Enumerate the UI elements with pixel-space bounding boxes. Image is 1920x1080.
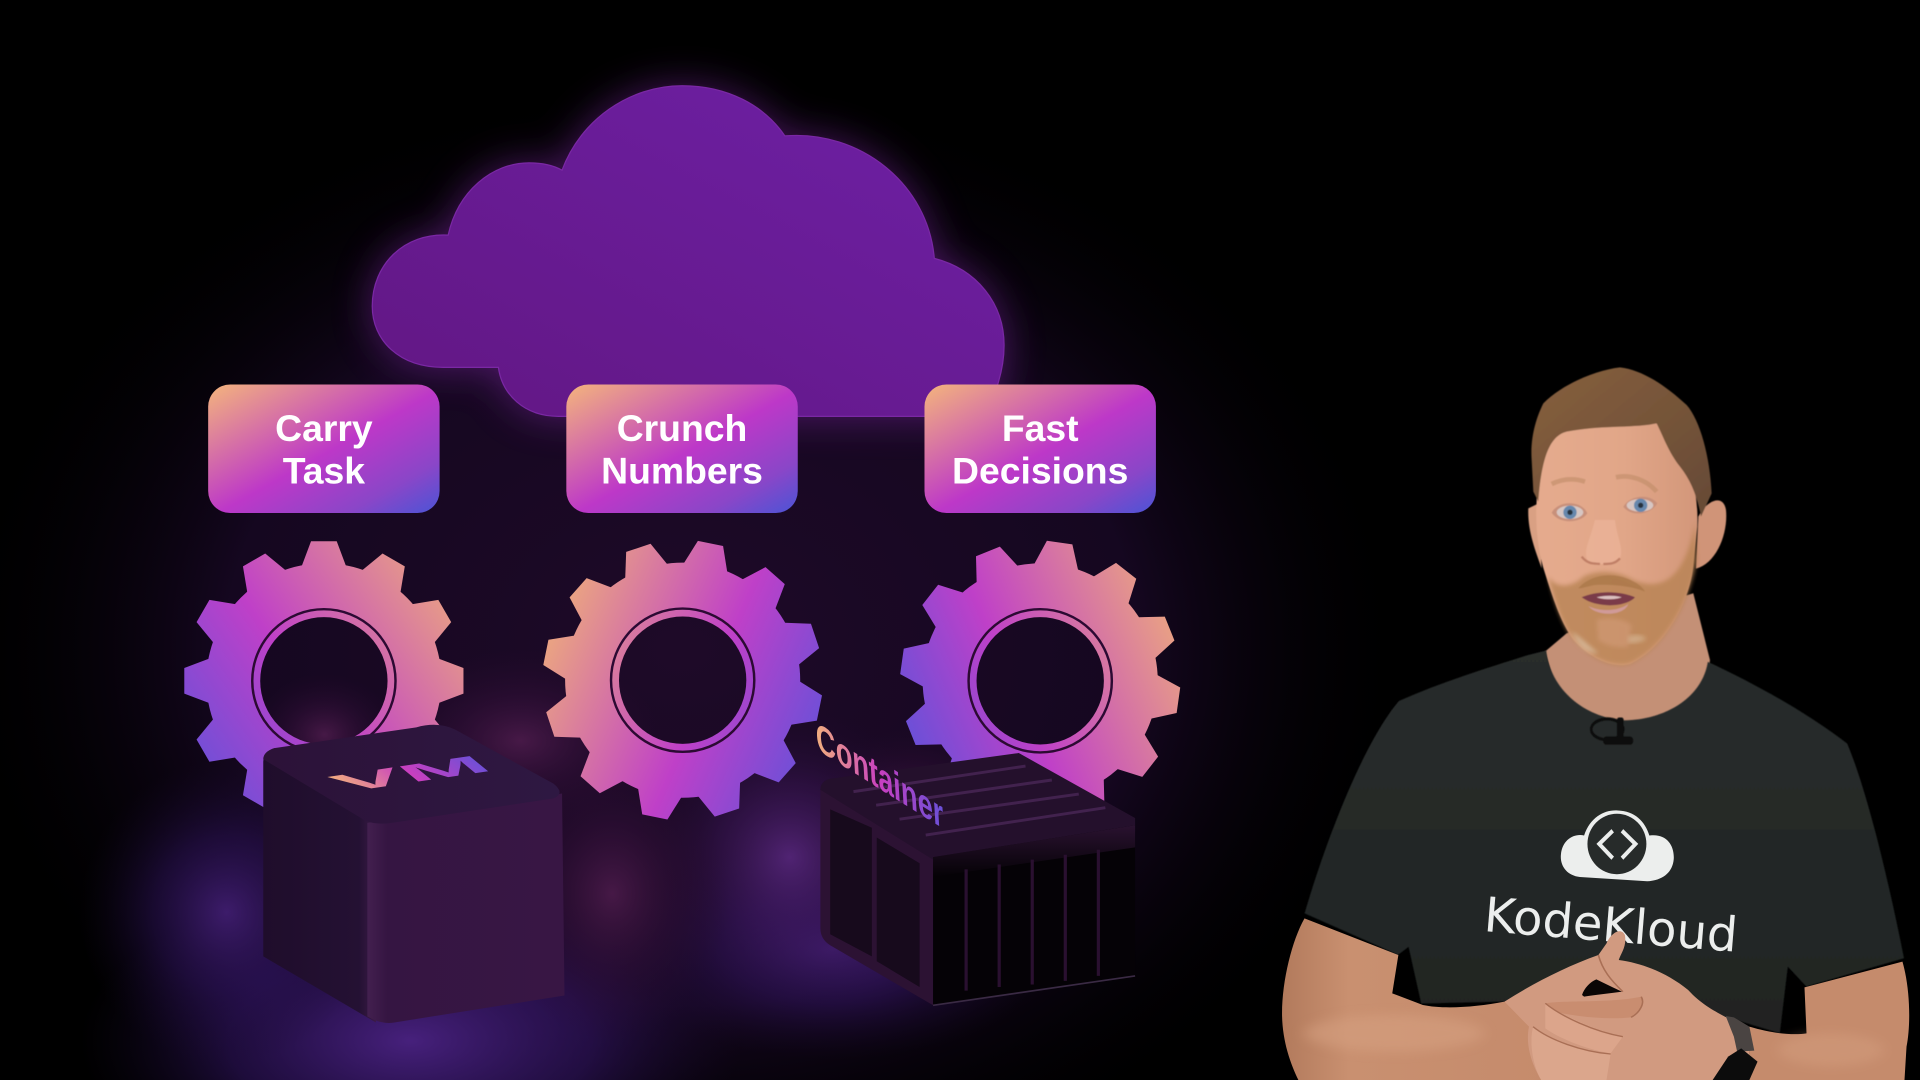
logo cloud [1561,810,1674,881]
KodeKloud logo [1482,810,1740,964]
cloud [372,86,1004,416]
label: carry task [208,384,440,513]
gear: crunch numbers [536,533,830,827]
label: carry task: Task [283,450,365,492]
shipping container [815,713,1135,1005]
t-shirt [1305,651,1904,1033]
head and neck [1528,367,1726,727]
clasped hands [1504,931,1749,1080]
label: crunch numbers [566,384,798,513]
label: crunch numbers: Numbers [601,450,763,492]
logo wordmark: KodeKloud [1482,887,1740,964]
VM cube [263,725,564,1023]
microphone [1591,718,1633,745]
arms, hands and watch [1282,918,1909,1080]
VM label: VM [321,750,501,797]
label: fast decisions: Fast [1002,407,1079,449]
label: fast decisions [924,384,1156,513]
right arm [1749,962,1909,1080]
watch [1726,1016,1754,1052]
presenter [1282,367,1909,1080]
gear: carry task [184,541,464,807]
label: carry task: Carry [275,407,373,449]
left arm [1282,918,1549,1080]
label: fast decisions: Decisions [952,450,1128,492]
gear: fast decisions [900,540,1180,801]
label: crunch numbers: Crunch [617,407,747,449]
torso and arm base [1305,651,1904,1033]
Container label: Container [815,713,945,838]
